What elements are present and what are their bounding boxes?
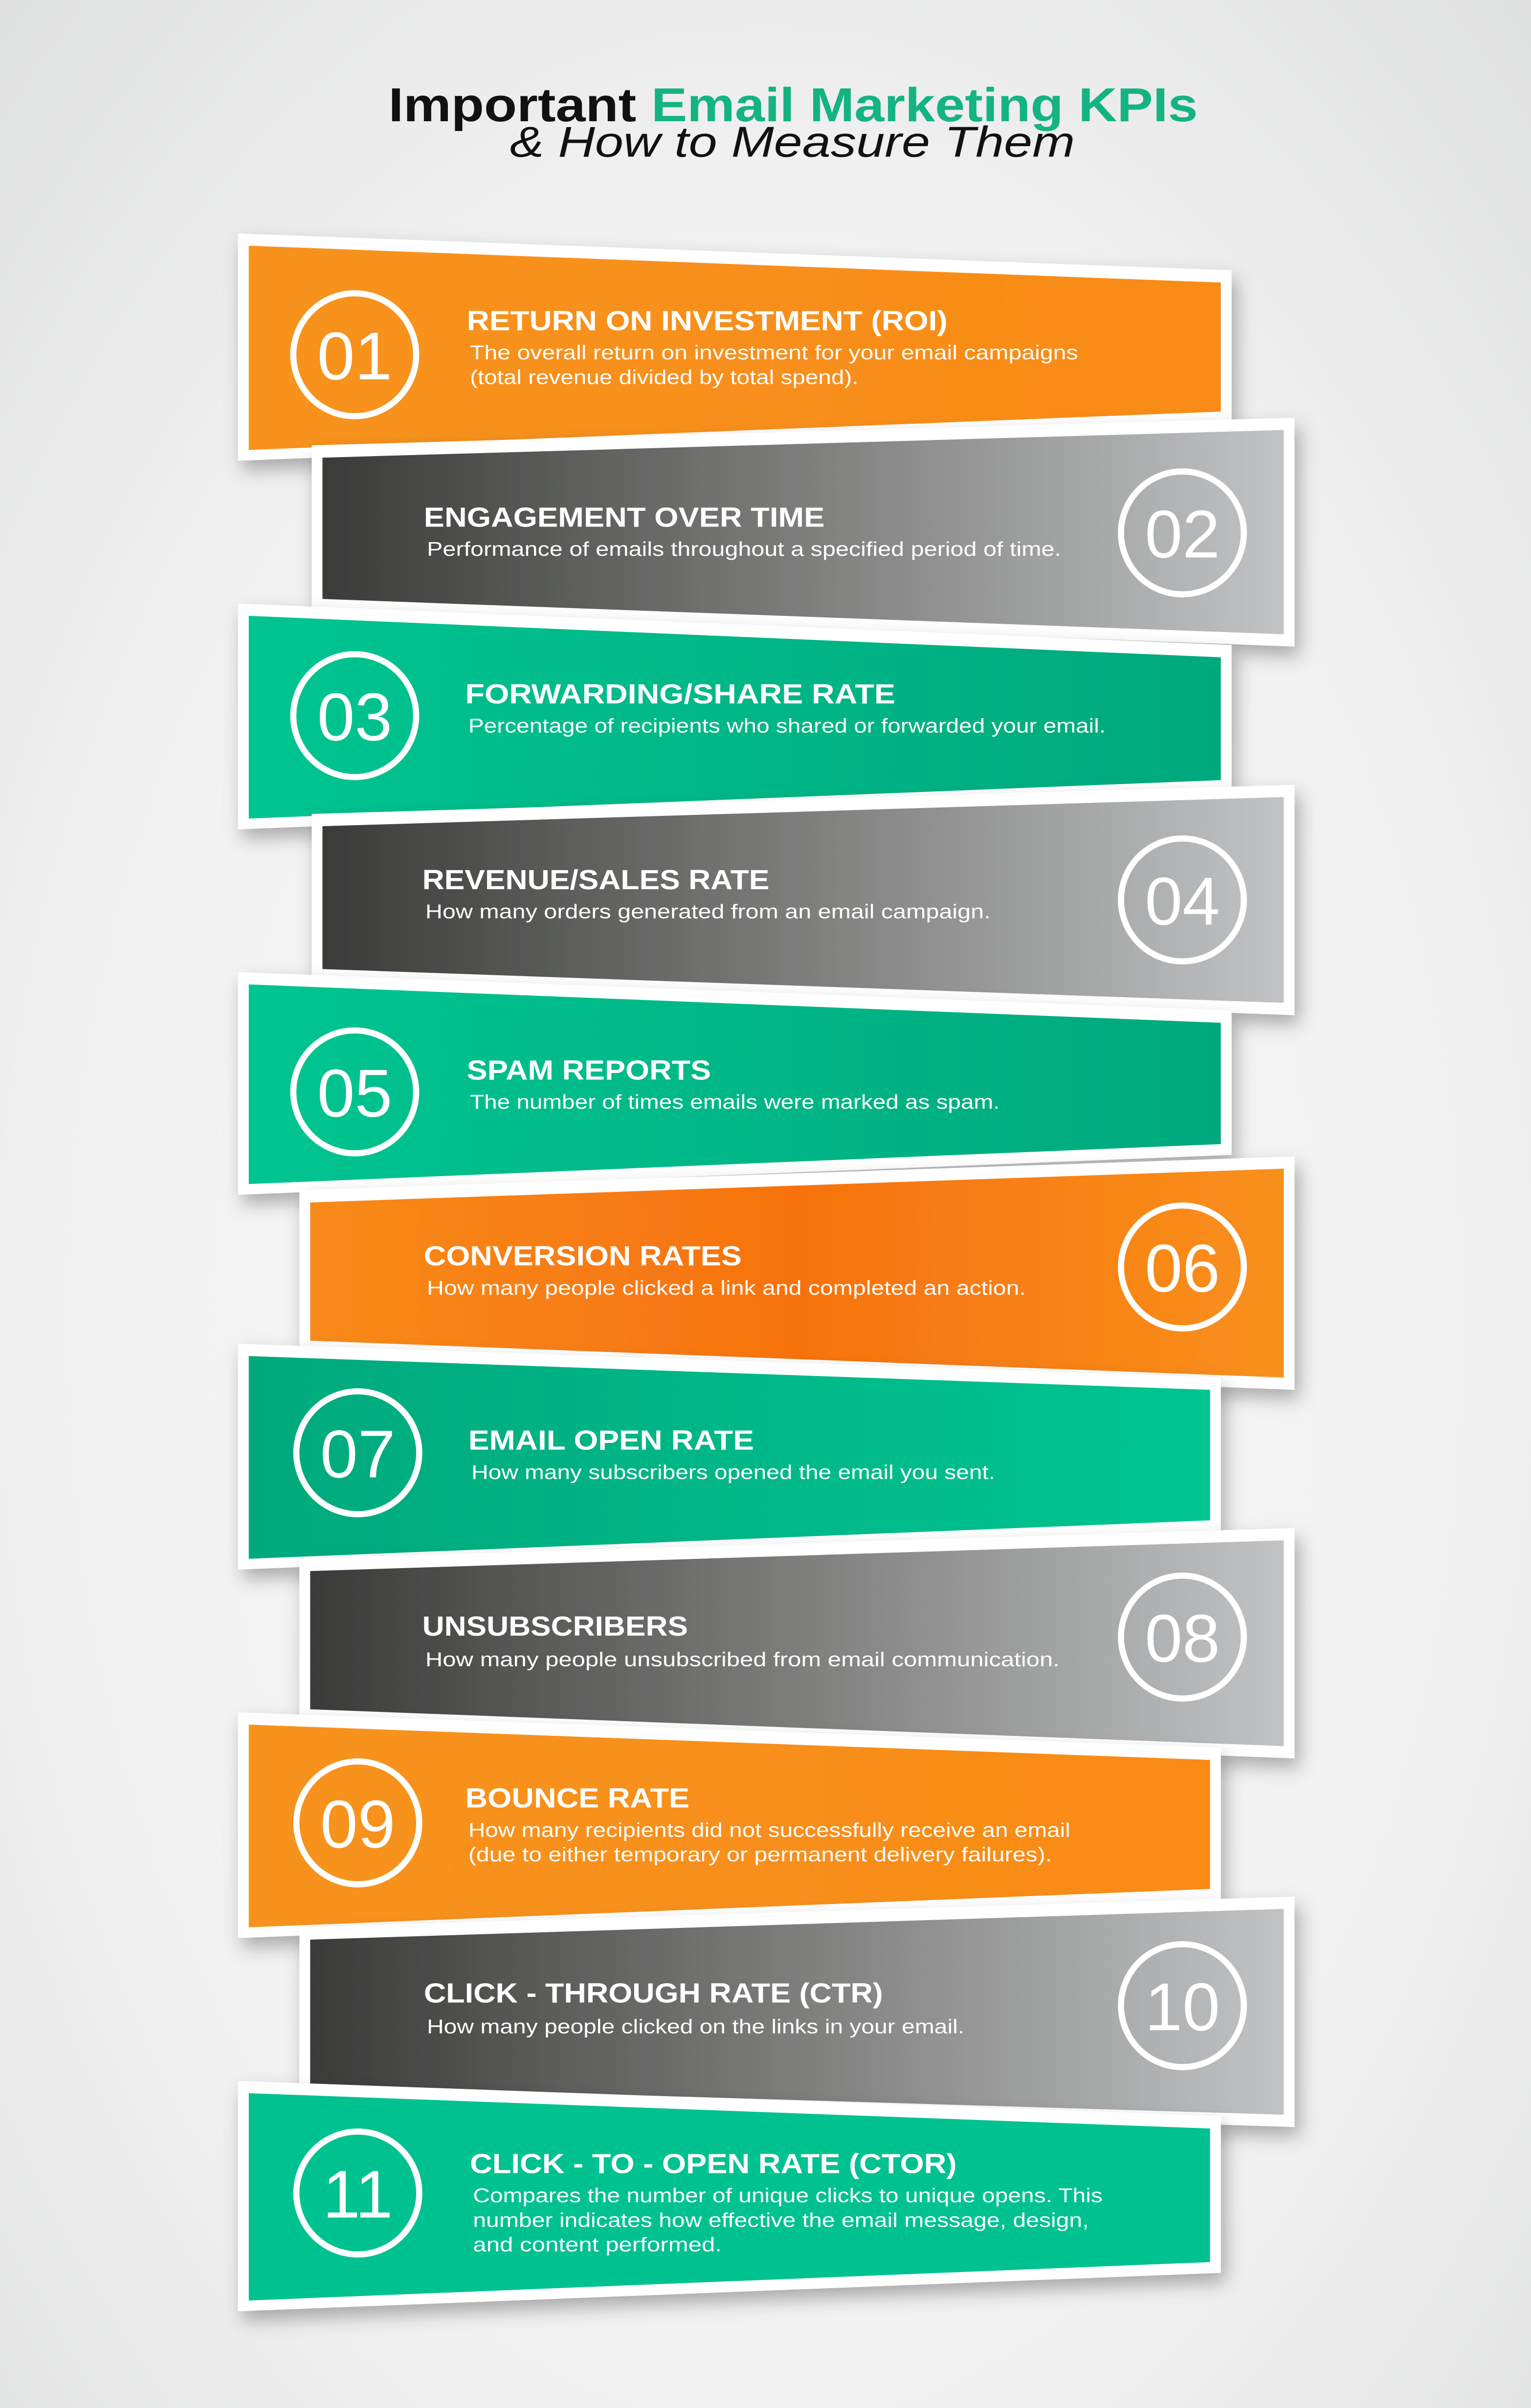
icon: number 08: 08 xyxy=(1145,1601,1220,1676)
icon: number 02 xyxy=(1121,471,1244,594)
description 09: (due to either temporary or permanent delivery failures). xyxy=(468,1843,1052,1866)
panel 05 xyxy=(238,972,1232,1195)
description 09: How many recipients did not successfully receive an email xyxy=(468,1818,1070,1841)
description 11: number indicates how effective the email message, design, xyxy=(473,2209,1089,2231)
icon: number 02: 02 xyxy=(1145,497,1220,572)
panel 06 xyxy=(299,1157,1294,1390)
heading 05: SPAM REPORTS xyxy=(467,1055,711,1086)
description 08: How many people unsubscribed from email communication. xyxy=(425,1648,1060,1671)
heading 10: CLICK - THROUGH RATE (CTR) xyxy=(424,1978,883,2009)
icon: number 01: 01 xyxy=(317,319,392,394)
heading 09: BOUNCE RATE xyxy=(466,1783,689,1814)
panel 08 xyxy=(299,1528,1294,1758)
heading 04: REVENUE/SALES RATE xyxy=(422,864,769,895)
panel 04 xyxy=(312,785,1294,1015)
panel 09 xyxy=(238,1712,1221,1938)
description 05: The number of times emails were marked as spam. xyxy=(470,1091,999,1113)
icon: number 10 xyxy=(1121,1944,1244,2067)
icon: number 07: 07 xyxy=(320,1417,396,1492)
description 07: How many subscribers opened the email you sent. xyxy=(471,1461,995,1483)
icon: number 09: 09 xyxy=(320,1787,396,1862)
heading 11: CLICK - TO - OPEN RATE (CTOR) xyxy=(470,2148,956,2179)
description 10: How many people clicked on the links in your email. xyxy=(427,2015,964,2037)
panel 11 xyxy=(238,2081,1221,2311)
icon: number 03: 03 xyxy=(317,679,392,755)
description 11: and content performed. xyxy=(473,2233,722,2256)
panel 10 xyxy=(299,1897,1294,2127)
heading 02: ENGAGEMENT OVER TIME xyxy=(424,502,824,533)
icon: number 04: 04 xyxy=(1145,864,1220,939)
heading 03: FORWARDING/SHARE RATE xyxy=(466,679,895,709)
description 03: Percentage of recipients who shared or forwarded your email. xyxy=(468,715,1106,737)
panel 03 xyxy=(238,604,1232,829)
icon: number 04 xyxy=(1121,838,1244,962)
description 01: (total revenue divided by total spend). xyxy=(470,366,858,388)
icon: number 05 xyxy=(293,1030,416,1153)
title: Important Email Marketing KPIs xyxy=(389,78,1198,131)
heading 07: EMAIL OPEN RATE xyxy=(468,1425,754,1456)
icon: number 09 xyxy=(296,1761,419,1884)
panel 07 xyxy=(238,1344,1221,1570)
icon: number 03 xyxy=(293,654,416,777)
description 02: Performance of emails throughout a specified period of time. xyxy=(427,538,1061,560)
icon: number 11 xyxy=(296,2132,419,2255)
icon: number 01 xyxy=(293,293,416,416)
title xyxy=(389,78,1198,166)
icon: number 08 xyxy=(1121,1576,1244,1699)
heading 01: RETURN ON INVESTMENT (ROI) xyxy=(467,305,948,336)
panel 02 xyxy=(312,418,1294,647)
subtitle: & How to Measure Them xyxy=(510,117,1075,166)
description 11: Compares the number of unique clicks to unique opens. This xyxy=(473,2184,1103,2207)
description 06: How many people clicked a link and completed an action. xyxy=(427,1276,1026,1299)
icon: number 11: 11 xyxy=(323,2157,393,2232)
heading 08: UNSUBSCRIBERS xyxy=(422,1611,688,1642)
icon: number 05: 05 xyxy=(317,1056,392,1131)
description 04: How many orders generated from an email campaign. xyxy=(425,900,991,923)
icon: number 10: 10 xyxy=(1145,1970,1220,2045)
icon: number 06: 06 xyxy=(1145,1231,1220,1306)
icon: number 07 xyxy=(296,1391,419,1514)
description 01: The overall return on investment for your email campaigns xyxy=(470,341,1078,364)
heading 06: CONVERSION RATES xyxy=(424,1241,742,1271)
icon: number 06 xyxy=(1121,1205,1244,1328)
panel 01 xyxy=(238,234,1232,460)
